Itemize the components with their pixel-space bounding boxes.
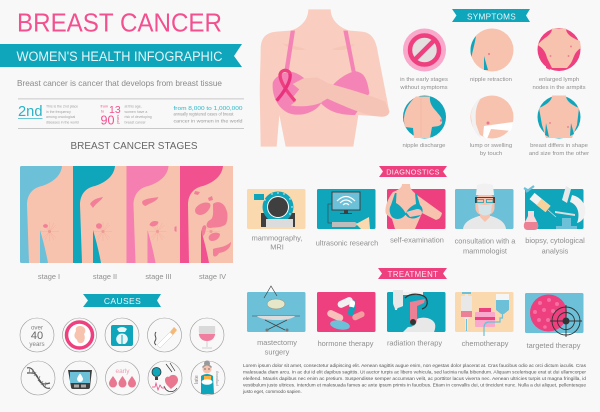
stat: age range: women have a <box>124 110 147 114</box>
diagnostics labels: analysis <box>542 246 569 256</box>
tile: hormone therapy <box>317 292 376 332</box>
causes ribbon: CAUSES <box>104 296 141 306</box>
stat: age range: at this age, <box>124 104 142 108</box>
stat: 2nd place: in the frequency <box>46 110 71 114</box>
symptom labels: in the early stages <box>400 77 448 83</box>
stat: annual cases <box>174 106 243 124</box>
treatment ribbon: TREATMENT <box>388 270 438 279</box>
stat: annual cases: cancer in women in the world <box>174 118 243 124</box>
stat: age range: to <box>101 110 104 114</box>
torso <box>260 9 389 147</box>
symptom labels: and size from the other <box>529 151 589 157</box>
symptom labels: enlarged lymph <box>539 77 579 83</box>
symptom labels: nodes in the armpits <box>532 85 586 91</box>
icon: over 40 years: 40 <box>31 330 43 342</box>
symptoms ribbon: SYMPTOMS <box>467 12 516 22</box>
title: BREAST CANCER <box>17 10 222 38</box>
icon: scales <box>105 318 139 352</box>
symptom labels: by touch <box>480 151 502 157</box>
icon: breast asymmetry <box>538 96 580 138</box>
panel: symptoms <box>399 28 589 157</box>
stage labels: stage III <box>145 272 172 281</box>
panel: treatment <box>247 286 584 337</box>
stat: 2nd place: diseases in the world <box>46 120 79 124</box>
stat: age range: years <box>116 115 120 124</box>
treatment ribbon <box>378 268 447 279</box>
panel: causes icons <box>20 318 225 395</box>
stat: age range: risk of developing <box>124 115 152 119</box>
icon: embryo <box>62 318 96 352</box>
icon: awareness ribbon <box>277 70 295 101</box>
stat: 2nd place: 2nd <box>18 103 42 120</box>
icon: lump by touch <box>470 96 514 139</box>
tile: radiation therapy <box>387 290 446 332</box>
panel: diagnostics <box>247 184 585 230</box>
icon: no symptoms <box>403 28 446 72</box>
stat: annual cases: annually registered cases of breast <box>174 112 234 116</box>
treatment labels: chemotherapy <box>462 339 509 348</box>
icon: cigarette <box>148 318 182 352</box>
treatment labels: surgery <box>265 348 290 356</box>
diagnostics labels: MRI <box>270 242 284 252</box>
diagnostics labels: mammography, <box>252 234 302 242</box>
body text <box>242 363 587 394</box>
stat: age range: 13 <box>109 104 121 116</box>
icon: late pregnancy: pregnancy <box>215 371 219 386</box>
causes ribbon <box>83 294 161 307</box>
tile: mammography <box>247 189 306 229</box>
diagnostics labels: consultation with a <box>455 236 516 246</box>
treatment labels <box>257 338 581 356</box>
stage labels: stage I <box>38 272 60 281</box>
stat: annual cases: from 8,000 to 1,000,000 <box>174 106 242 112</box>
stage IV <box>180 166 233 263</box>
tile: mastectomy surgery <box>247 286 306 332</box>
stage labels: stage IV <box>199 272 226 281</box>
icon: hormones and blood pressure <box>148 361 182 395</box>
statistics strip <box>18 98 244 129</box>
icon: early menstruation: early <box>115 368 130 375</box>
treatment labels: radiation therapy <box>387 338 442 348</box>
body text: vestibulum justo ultrices. Interdum et malesuada fames ac ante ipsum primis in faucibus. Etiam in convallis dui, ut tincidunt nunc. Nulla a dui aliquet, pellentesque <box>243 382 586 388</box>
diagnostics labels: ultrasonic research <box>316 238 378 248</box>
diagnostics labels: self-examination <box>390 236 444 244</box>
symptom labels: nipple discharge <box>403 143 446 149</box>
icon: nipple discharge <box>403 96 446 138</box>
icon: nipple retraction <box>470 28 514 72</box>
bra <box>273 31 369 115</box>
icon: over 40 years <box>20 318 54 352</box>
symptoms ribbon <box>452 9 530 22</box>
panel: stages illustration <box>20 166 233 263</box>
icon: DNA <box>21 361 55 395</box>
treatment labels: targeted therapy <box>527 341 581 350</box>
diagnostics labels: biopsy, cytological <box>525 236 585 245</box>
icon: wine glass <box>190 318 224 352</box>
diagnostics ribbon <box>379 166 447 177</box>
tile: self-examination <box>385 184 446 229</box>
body text: Lorem ipsum dolor sit amet, consectetur adipiscing elit. Aenean sagittis augue enim, non egestas dolor placerat at. Cras faucibus odio ac orci dictum iaculis. Cras <box>243 363 587 368</box>
stat: age range: from <box>100 104 108 108</box>
icon: over 40 years: years <box>29 341 45 348</box>
body text: eleifend. Mauris dapibus nec enim ac pretium. Suspendisse semper accumsan velit, ac porttitor lacus viverra nec. Aenean ultricies turpis ut magna fringilla, id <box>243 376 586 381</box>
treatment labels: hormone therapy <box>318 339 374 348</box>
diagnostics ribbon: DIAGNOSTICS <box>386 168 440 176</box>
stat: age range <box>100 104 152 128</box>
icon: over 40 years: over <box>31 324 43 332</box>
stage II <box>73 166 126 263</box>
stage I <box>20 166 74 263</box>
collarbone shading <box>283 43 355 50</box>
subtitle ribbon: WOMEN'S HEALTH INFOGRAPHIC <box>16 49 223 64</box>
stage III <box>126 166 180 263</box>
stages heading: BREAST CANCER STAGES <box>70 141 198 152</box>
stat: 2nd place <box>18 103 79 124</box>
tile: targeted therapy <box>525 293 584 337</box>
stat: 2nd place: This is the 2nd place <box>46 104 78 108</box>
tile: ultrasonic <box>317 189 376 229</box>
symptom labels: nipple retraction <box>470 77 512 83</box>
tile: chemotherapy <box>455 292 514 336</box>
icon: early menstruation <box>106 361 140 395</box>
icon: late pregnancy: late <box>194 375 200 384</box>
intro sentence: Breast cancer is cancer that develops from breast tissue <box>17 78 222 88</box>
symptom labels: without symptoms <box>399 85 448 91</box>
body text: malesuada diam arcu. In ac dui id elit dapibus sagittis. Ut auctor turpis ac libero vehicula, sed lacinia nulla bibendum. Aliquam scelerisque erat ut dui ullamcorper <box>243 370 586 374</box>
icon: mammogram device <box>63 361 97 395</box>
hero illustration: woman with pink ribbon <box>260 9 389 147</box>
body text: justo eget, commodo sapien. <box>242 389 302 394</box>
forearm and hand <box>291 77 389 117</box>
symptom labels: breast differs in shape <box>530 143 589 149</box>
tile: biopsy <box>524 186 585 230</box>
stat: 2nd place: among oncological <box>46 115 75 119</box>
symptom labels: lump or swelling <box>470 143 512 149</box>
tile: consultation <box>455 184 514 229</box>
stat: age range: 90 <box>100 114 115 128</box>
treatment labels: mastectomy <box>257 338 297 347</box>
diagnostics labels: mammologist <box>463 246 507 256</box>
symptom labels <box>399 77 589 157</box>
icon: enlarged lymph nodes <box>538 28 581 71</box>
stage labels <box>38 272 226 281</box>
stage labels: stage II <box>93 272 117 281</box>
icon: late pregnancy <box>191 360 225 395</box>
stat: age range: breast cancer <box>124 120 147 124</box>
subtitle ribbon <box>0 44 242 67</box>
diagnostics labels <box>252 234 585 256</box>
